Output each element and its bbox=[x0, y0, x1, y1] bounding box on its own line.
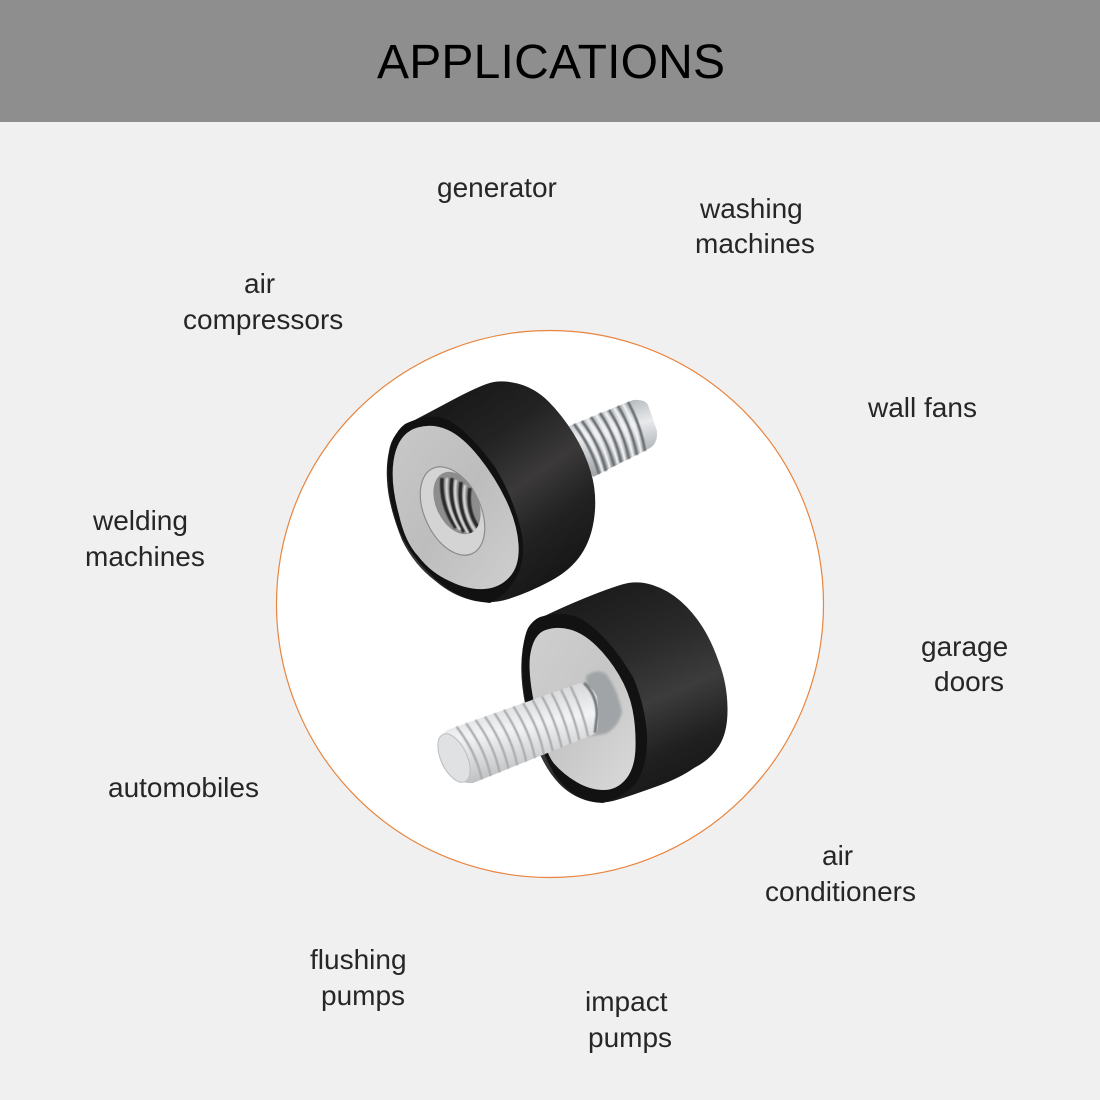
bottom mount rubber body bbox=[521, 582, 728, 802]
label: wall fans: wall fans bbox=[867, 392, 977, 423]
label: flushing pumps bbox=[310, 944, 407, 1011]
top mount rubber body bbox=[387, 381, 595, 602]
label: air conditioners bbox=[765, 840, 916, 907]
label: garage doors: doors bbox=[934, 666, 1004, 697]
bottom mount silver face bbox=[530, 628, 636, 790]
label: flushing pumps: pumps bbox=[321, 980, 405, 1011]
label: impact pumps: impact bbox=[585, 986, 668, 1017]
label: generator: generator bbox=[437, 172, 557, 203]
top mount bolt bbox=[567, 400, 657, 477]
bolt collar bbox=[586, 671, 622, 736]
bottom mount bolt bbox=[431, 671, 622, 787]
label: automobiles: automobiles bbox=[108, 772, 259, 803]
label: impact pumps bbox=[585, 986, 672, 1053]
product: top rubber mount with threaded hole bbox=[387, 381, 657, 603]
bottom mount face rim bbox=[522, 614, 647, 803]
title: APPLICATIONS bbox=[377, 36, 725, 89]
label: welding machines: welding bbox=[92, 505, 188, 536]
top mount silver face bbox=[393, 426, 519, 589]
top mount face rim bbox=[388, 417, 523, 603]
label: garage doors bbox=[921, 631, 1008, 697]
label: air compressors bbox=[183, 268, 343, 335]
label: washing machines bbox=[695, 193, 815, 259]
header band bbox=[0, 0, 1100, 122]
label: air compressors: air bbox=[244, 268, 275, 299]
label: impact pumps: pumps bbox=[588, 1022, 672, 1053]
label: washing machines: washing bbox=[699, 193, 803, 224]
label: air conditioners: air bbox=[822, 840, 853, 871]
label: washing machines: machines bbox=[695, 228, 815, 259]
top mount threaded insert bbox=[420, 466, 486, 556]
label: garage doors: garage bbox=[921, 631, 1008, 662]
central circle bbox=[276, 330, 824, 878]
bolt tip bbox=[431, 729, 477, 787]
label: welding machines bbox=[85, 505, 205, 572]
label: air conditioners: conditioners bbox=[765, 876, 916, 907]
product: bottom rubber mount with bolt bbox=[431, 582, 728, 803]
label: air compressors: compressors bbox=[183, 304, 343, 335]
label: flushing pumps: flushing bbox=[310, 944, 407, 975]
label: welding machines: machines bbox=[85, 541, 205, 572]
